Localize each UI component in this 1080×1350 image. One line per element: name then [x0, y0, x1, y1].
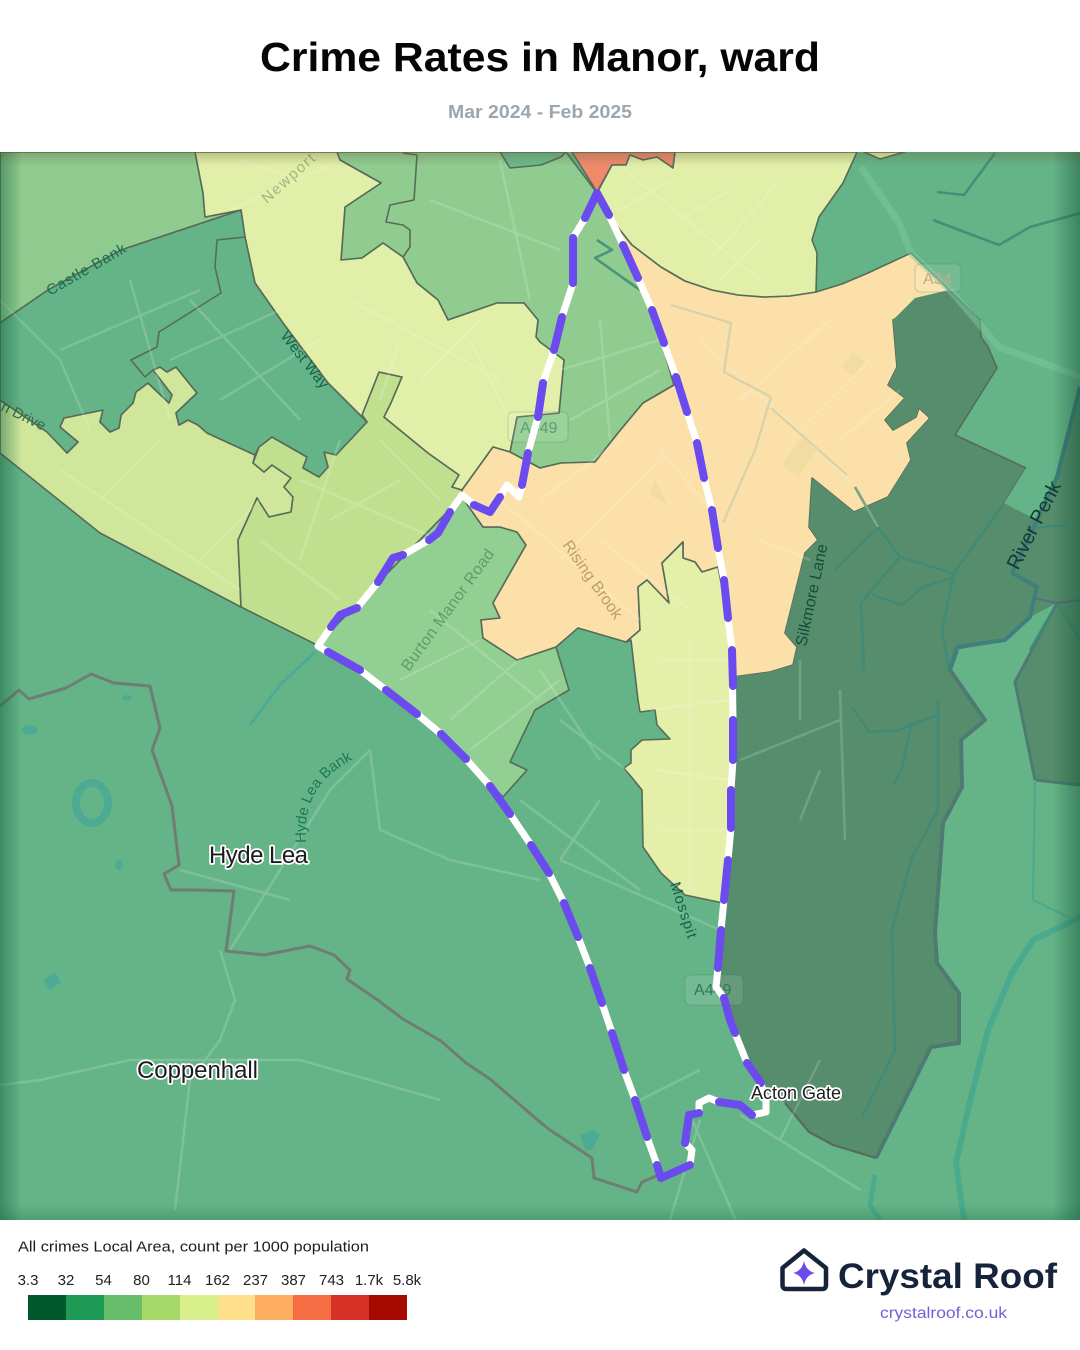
area: south-west yellow-green band — [0, 367, 293, 607]
legend values: 387 — [281, 1272, 306, 1289]
place label: Acton Gate: Acton Gate — [751, 1083, 841, 1103]
icon: house with star — [782, 1250, 826, 1289]
legend values: 162 — [205, 1272, 230, 1289]
town blocks — [650, 352, 865, 505]
legend values: 743 — [319, 1272, 344, 1289]
area: pale yellow south of town — [624, 542, 733, 903]
road label: Hyde Lea Bank: Hyde Lea Bank — [295, 752, 352, 842]
ward boundary — [318, 193, 766, 1178]
area: salmon high crime top — [572, 152, 675, 192]
legend values: 32 — [58, 1272, 74, 1289]
road label: Newport: Newport — [258, 150, 319, 207]
area: yellow west centre — [195, 152, 564, 490]
area: pale yellow north east — [597, 152, 857, 297]
motorway — [956, 917, 1080, 1220]
light grey streams in town — [671, 305, 878, 527]
logo wordmark: Crystal Roof — [838, 1257, 1057, 1296]
road label: Burton Manor Road: Burton Manor Road — [398, 546, 498, 674]
road label: A34: A34 — [923, 271, 952, 288]
river penk — [950, 387, 1080, 670]
area: top strip mid green — [500, 152, 566, 168]
road label: Rising Brook: Rising Brook — [559, 538, 626, 623]
area: peach rising brook and town centre — [462, 225, 949, 677]
boundary inside castle bank — [131, 237, 245, 377]
area: dark green east — [1015, 600, 1080, 785]
parish boundary — [0, 674, 659, 1192]
stream at top of south area — [250, 652, 315, 725]
ponds — [22, 695, 600, 1150]
area: burton manor light green — [317, 497, 569, 797]
road label: Silkmore Lane: Silkmore Lane — [793, 542, 832, 648]
wide trunk road — [861, 167, 1080, 377]
boundary inside north area — [386, 153, 417, 257]
road label: A449 south: A449 — [694, 982, 731, 999]
area: small yellow top right — [864, 152, 905, 159]
roads network — [0, 160, 900, 1230]
place label: Coppenhall: Coppenhall — [137, 1057, 258, 1084]
subtitle: date range: Mar 2024 - Feb 2025 — [448, 102, 632, 122]
legend values: 114 — [168, 1272, 191, 1289]
place label: Hyde Lea: Hyde Lea — [209, 842, 309, 869]
stream south east — [1033, 780, 1068, 917]
legend values: 1.7k — [355, 1272, 384, 1289]
road label: West Way: West Way — [277, 328, 332, 392]
dark area outlines and river edge — [785, 290, 1080, 1158]
area: castle bank green — [0, 210, 367, 477]
map edge shading — [0, 152, 1080, 1220]
label: River Penk: River Penk — [1003, 477, 1066, 573]
stream near acton gate — [870, 1175, 880, 1220]
ward outline white — [318, 193, 766, 1178]
logo: Crystal Roof — [782, 1250, 1057, 1322]
legend values: 5.8k — [393, 1272, 422, 1289]
website url: crystalroof.co.uk — [880, 1305, 1008, 1322]
road badges — [508, 264, 961, 1005]
legend values: 80 — [133, 1272, 150, 1289]
road label: Castle Bank: Castle Bank — [44, 240, 130, 299]
legend values: 237 — [243, 1272, 268, 1289]
area: dark green silkmore — [716, 290, 1080, 1158]
legend values: 3.3 — [18, 1272, 38, 1289]
area: top left light green — [0, 152, 241, 323]
streams and water — [595, 153, 1080, 1117]
mid green band by river — [1004, 467, 1030, 516]
title: Crime Rates in Manor, ward — [260, 34, 820, 80]
ward dashes purple — [328, 193, 761, 1178]
area: lime residential — [238, 372, 462, 645]
map base: mid green area — [0, 152, 1080, 1220]
legend — [18, 1238, 422, 1320]
legend colour scale — [28, 1295, 407, 1320]
road label: Mosspit: Mosspit — [666, 880, 701, 941]
area: north light green — [337, 152, 674, 468]
legend title: All crimes Local Area, count per 1000 population — [18, 1238, 369, 1256]
road label: A449 north: A449 — [520, 420, 557, 437]
legend values: 54 — [95, 1272, 112, 1289]
legend values — [18, 1272, 422, 1289]
